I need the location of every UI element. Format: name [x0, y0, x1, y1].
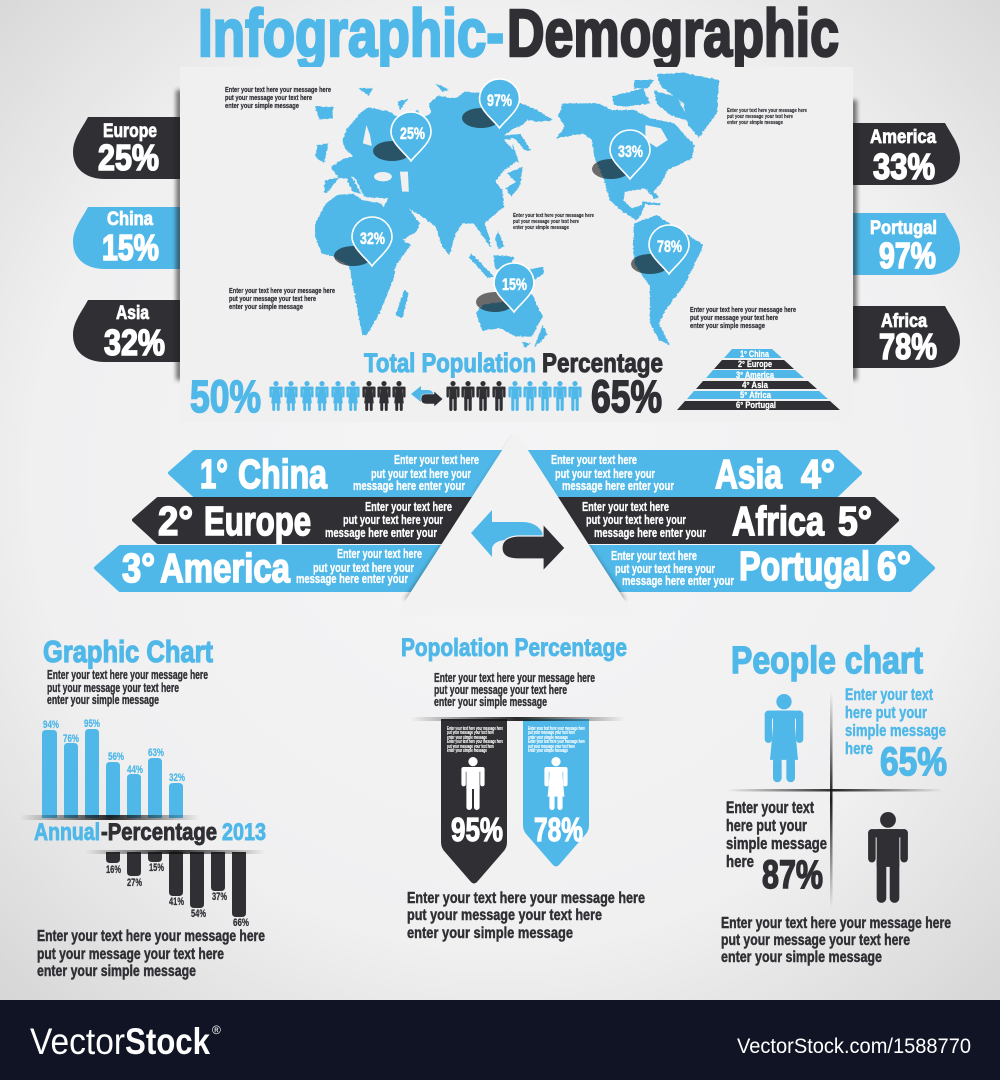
map note: lower right	[690, 305, 796, 330]
ranking pyramid: 6° Portugal	[736, 400, 776, 410]
map pin: South America 78%	[631, 225, 689, 274]
tab: Europe 25%: Europe	[103, 121, 157, 142]
tab: China 15%	[73, 207, 182, 269]
intro text: Enter your text here your message here	[47, 668, 208, 682]
footer bar	[0, 1000, 1000, 1080]
caption text: enter your simple message	[37, 963, 196, 980]
ribbon labels: China	[238, 451, 328, 497]
ribbon labels: Africa	[732, 498, 825, 544]
footer logo: Stock	[125, 1021, 210, 1062]
intro text: put your message your text here	[434, 683, 567, 697]
ribbon labels: Portugal	[739, 543, 870, 589]
tab: Asia 32%: 32%	[104, 322, 165, 363]
stat: 65%: 65%	[591, 371, 662, 422]
ribbon body text: message here enter your	[594, 525, 706, 540]
man text: Enter your text	[726, 799, 814, 817]
intro text	[434, 671, 595, 709]
heading: people chart: People chart	[731, 640, 923, 682]
heading: population percentage: Popolation Percentage	[401, 634, 627, 662]
pictogram: men	[446, 381, 582, 411]
map note: top right	[727, 108, 808, 126]
caption text	[407, 890, 645, 942]
map note: top left: Enter your text here your message here	[225, 85, 331, 94]
ribbon: 2 Europe	[134, 499, 514, 542]
tab: Africa 78%: Africa	[881, 311, 927, 332]
panel: population percentage	[401, 634, 645, 942]
map note: middle: put your message your text here	[513, 219, 580, 225]
icon: swap arrows	[471, 510, 565, 571]
man text: here	[726, 853, 754, 871]
heading: total population percentage: Percentage	[542, 348, 663, 378]
map note: top left: put your message your text here	[225, 93, 312, 102]
icon: swap arrows small	[411, 386, 443, 407]
woman text: Enter your text	[845, 686, 933, 704]
banner: male 95%: 95%	[451, 811, 503, 848]
ribbon body text: Enter your text here	[337, 546, 422, 561]
ribbon body text	[296, 452, 734, 588]
man text: simple message	[726, 835, 827, 853]
stat: 50%: 50%	[190, 371, 261, 422]
banner: female 78%: enter your simple message	[528, 748, 568, 754]
banner: female 78%	[523, 719, 589, 866]
tab: Portugal 97%: 97%	[879, 235, 936, 276]
banner: male 95%: enter your simple message	[447, 735, 487, 741]
bar labels: blue: 94%	[43, 719, 59, 731]
map note: lower left: enter your simple message	[229, 302, 303, 311]
bar chart: blue bars	[42, 729, 183, 818]
ribbon body text: put your text here your	[615, 561, 715, 576]
ribbon labels: 4°	[801, 451, 835, 497]
bar labels: dark: 54%	[191, 908, 206, 920]
map pin: Africa 32%: 32%	[360, 229, 385, 248]
ranking pyramid: 5° Africa	[740, 390, 772, 400]
ribbon: 4 Asia	[514, 452, 860, 495]
footer logo: ®	[212, 1023, 221, 1037]
map note: top right: put your message your text here	[727, 114, 794, 120]
tab: Portugal 97%: Portugal	[870, 218, 937, 239]
bar labels: blue: 95%	[84, 718, 100, 730]
ribbon body text: Enter your text here	[394, 452, 479, 467]
ribbon body text: put your text here your	[343, 512, 443, 527]
bar labels: blue	[43, 718, 185, 784]
ranking pyramid: 2° Europe	[738, 359, 772, 369]
caption text	[37, 928, 265, 980]
map pin: America 33%	[592, 130, 650, 179]
caption text: enter your simple message	[407, 925, 573, 942]
pictogram: women	[269, 381, 406, 411]
intro text: enter your simple message	[434, 695, 547, 709]
caption text: Enter your text here your message here	[407, 890, 645, 907]
ribbon body text: put your text here your	[586, 512, 686, 527]
ribbon: 6 Portugal	[514, 547, 933, 590]
ribbon body text: message here enter your	[622, 573, 734, 588]
chart divider heading: -Percentage	[101, 819, 217, 846]
ribbon body text: message here enter your	[353, 478, 465, 493]
map note: top right: Enter your text here your message here	[727, 108, 808, 114]
caption text: Enter your text here your message here	[37, 928, 265, 945]
map note: lower right: enter your simple message	[690, 321, 765, 330]
woman text: simple message	[845, 722, 946, 740]
ribbon labels: 3°	[122, 545, 155, 591]
bar labels: dark: 27%	[127, 877, 142, 889]
ribbon body text: Enter your text here	[611, 548, 697, 563]
tab: America 33%	[851, 123, 960, 187]
chart divider heading	[34, 819, 266, 846]
ribbon body text: put your text here your	[313, 560, 414, 575]
map pin: Russia 97%: 97%	[487, 91, 512, 110]
ribbon body text: message here enter your	[296, 571, 408, 586]
panel: graphic chart	[20, 634, 266, 980]
bar labels: dark: 37%	[212, 891, 227, 903]
man text: here put your	[726, 817, 807, 835]
bar labels: blue: 56%	[108, 751, 124, 763]
map note: middle: enter your simple message	[513, 225, 570, 231]
ribbon: 5 Africa	[514, 499, 897, 542]
footer logo	[30, 1021, 221, 1062]
tab: Asia 32%	[73, 300, 182, 363]
stat: 65%: 65%	[880, 740, 947, 784]
ribbon labels: 6°	[877, 543, 911, 589]
banner: male 95%	[441, 719, 507, 884]
tab: America 33%: America	[870, 127, 936, 148]
center triangle	[396, 430, 634, 615]
map note: lower left	[229, 286, 335, 311]
map note: top left: enter your simple message	[225, 101, 299, 110]
ribbon body text: message here enter your	[325, 525, 437, 540]
map pin: Russia 97%	[462, 79, 520, 128]
icon: man	[868, 812, 908, 903]
map note: lower right: Enter your text here your message here	[690, 305, 796, 314]
ranking pyramid: 3° America	[736, 370, 775, 380]
tab: Portugal 97%	[851, 213, 960, 276]
bar labels: dark: 15%	[149, 862, 164, 874]
banner: male 95%: put your message your text here	[447, 744, 494, 750]
ribbon labels: Asia	[715, 451, 783, 497]
icon: woman	[765, 694, 803, 782]
ribbon labels: Europe	[204, 498, 311, 544]
tab: Europe 25%: 25%	[98, 137, 159, 178]
bar labels: blue: 32%	[169, 772, 185, 784]
bar labels: dark: 66%	[233, 917, 249, 929]
ribbon body text: message here enter your	[562, 478, 674, 493]
caption text: put your message your text here	[721, 932, 910, 949]
tab: China 15%: 15%	[102, 227, 159, 268]
bar chart: dark bars	[106, 852, 246, 917]
map panel	[176, 67, 857, 422]
map pin: Africa 32%	[334, 217, 392, 266]
banner: female 78%: Enter your text here your message here	[528, 739, 585, 745]
caption text	[721, 915, 951, 966]
stat: 87%: 87%	[762, 853, 823, 897]
map pin: America 33%: 33%	[618, 142, 643, 161]
ranking pyramid: 4° Asia	[742, 380, 769, 390]
ribbon: 1 China	[170, 452, 514, 495]
map pin: Europe 25%	[373, 112, 431, 161]
world map	[315, 73, 719, 348]
map pin: South America 78%: 78%	[657, 237, 682, 256]
caption text: put your message your text here	[37, 946, 224, 963]
map note: lower left: Enter your text here your message here	[229, 286, 335, 295]
ribbon labels: 1°	[200, 451, 228, 497]
chart divider heading: 2013	[222, 819, 266, 846]
banner: female 78%: 78%	[534, 811, 583, 848]
tab: Europe 25%	[73, 117, 182, 179]
ranking ribbons	[96, 430, 933, 615]
man text	[726, 799, 827, 871]
map note: middle	[513, 213, 595, 231]
tab: China 15%: China	[107, 209, 153, 230]
ribbon labels: America	[160, 545, 291, 591]
tab: Africa 78%	[851, 306, 960, 368]
bar labels: blue: 76%	[63, 733, 79, 745]
ribbon labels: 2°	[158, 498, 193, 544]
ribbon body text: put your text here your	[371, 466, 471, 481]
ribbon body text: put your text here your	[555, 466, 655, 481]
banner: male 95%: enter your simple message	[447, 748, 487, 754]
banner: male 95%: Enter your text here your message here	[447, 726, 503, 732]
map pin: Europe 25%: 25%	[400, 124, 425, 143]
left region tabs	[73, 117, 182, 363]
ribbon body text: Enter your text here	[365, 499, 452, 514]
chart divider heading: Annual	[34, 819, 100, 846]
map note: lower left: put your message your text here	[229, 294, 316, 303]
banner: male 95%: Enter your text here your message here	[447, 739, 503, 745]
tab: America 33%: 33%	[873, 146, 935, 187]
woman text: here	[845, 740, 873, 758]
footer url: VectorStock.com/1588770	[737, 1035, 971, 1058]
bar labels: blue: 63%	[148, 747, 164, 759]
footer logo: Vector	[30, 1021, 125, 1062]
intro text	[47, 668, 208, 707]
ribbon: 3 America	[96, 547, 514, 590]
bar labels: blue: 44%	[127, 764, 143, 776]
caption text: enter your simple message	[721, 949, 882, 966]
bar labels: dark	[106, 862, 249, 929]
ribbon body text: Enter your text here	[582, 499, 669, 514]
map pin: Australia 15%	[476, 263, 534, 312]
panel: people chart	[721, 640, 951, 966]
ribbon labels	[122, 451, 911, 591]
ribbon labels: 5°	[838, 498, 872, 544]
map note: middle: Enter your text here your message here	[513, 213, 595, 219]
tab: Asia 32%: Asia	[116, 303, 149, 324]
tab: Africa 78%: 78%	[879, 326, 937, 367]
map pin: Australia 15%: 15%	[502, 275, 527, 294]
title	[198, 0, 839, 71]
woman text: here put your	[845, 704, 927, 722]
intro text: Enter your text here your message here	[434, 671, 595, 685]
woman text	[845, 686, 946, 758]
heading: total population percentage: Total Population	[364, 348, 536, 378]
ranking pyramid	[677, 349, 840, 410]
map note: top right: enter your simple message	[727, 120, 784, 126]
banner: female 78%: put your message your text here	[528, 730, 575, 736]
right region tabs	[851, 123, 960, 368]
heading: graphic chart: Graphic Chart	[43, 634, 213, 669]
map note: lower right: put your message your text here	[690, 313, 778, 322]
banner: female 78%: Enter your text here your message here	[528, 726, 585, 732]
intro text: put your message your text here	[47, 681, 179, 695]
bar labels: dark: 16%	[106, 864, 121, 876]
bar labels: dark: 41%	[169, 896, 184, 908]
banner: female 78%: put your message your text here	[528, 744, 575, 750]
banner: male 95%: put your message your text here	[447, 730, 494, 736]
map note: top left	[225, 85, 331, 110]
caption text: put your message your text here	[407, 907, 602, 924]
banner: female 78%: enter your simple message	[528, 735, 568, 741]
ribbon body text: Enter your text here	[551, 452, 637, 467]
intro text: enter your simple message	[47, 693, 159, 707]
ranking pyramid: 1° China	[740, 349, 770, 359]
